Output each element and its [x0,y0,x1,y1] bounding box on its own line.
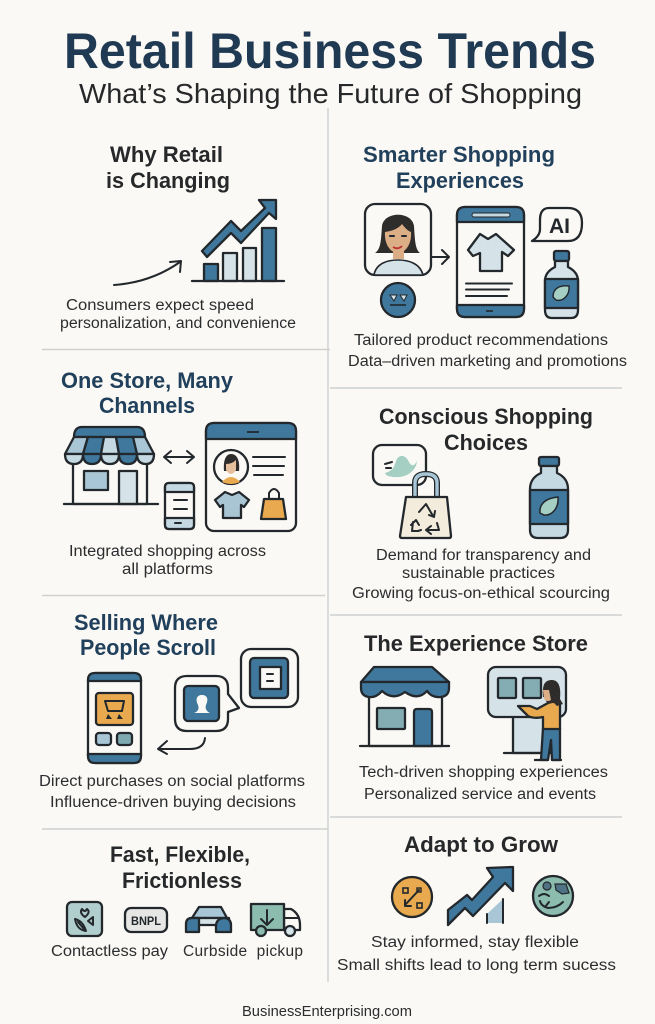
icon: experience storefront [360,667,449,746]
panel: the experience store [359,631,608,803]
text: consumers: Consumers expect speed [66,297,254,314]
icon: large leaf bottle [530,457,568,538]
icon: AI speech bubble: AI [549,215,570,238]
text: integrated [69,543,266,578]
panel: adapt to grow [337,832,616,974]
arrow: curved [114,261,181,285]
text: recommendations: Tailored product recommendations [354,332,608,349]
text: direct purchases: Direct purchases on social platforms [39,773,305,790]
heading: experience store: The Experience Store [364,631,588,656]
icon: product card bubble [241,649,298,707]
text: recommendations [348,332,627,370]
heading: smarter shopping [363,142,555,193]
title: Retail Business Trends [64,23,596,79]
panel: why retail is changing [60,142,296,332]
arrow: back to phone [158,738,205,754]
icon: profile speech bubble [175,676,239,731]
text: curbside: Curbside pickup [183,943,303,960]
text: demand: Demand for transparency and [376,547,591,564]
text: stay informed [337,934,616,974]
text: stay informed: Small shifts lead to long term sucess [337,957,616,974]
icon: growth arrow [448,867,513,925]
panel: fast, flexible, frictionless [51,842,303,960]
icon: orange network circle [392,877,432,917]
icon: BNPL card: BNPL [131,916,161,928]
text: tech-driven [359,764,608,803]
icon: small phone [165,483,194,529]
title [64,23,596,109]
text: contactless: Contactless pay [51,943,168,960]
icon: green globe [533,876,573,916]
heading: selling: Selling Where [74,610,218,635]
heading: smarter shopping: Smarter Shopping [363,142,555,167]
icon: kiosk with shopper [488,667,566,760]
text: direct purchases: Influence-driven buying decisions [50,794,296,811]
icon: shopper portrait [365,204,431,275]
text: recommendations: Data–driven marketing and promotions [348,353,627,370]
text: demand [352,547,610,602]
heading: adapt: Adapt to Grow [404,832,559,857]
text: demand: Growing focus-on-ethical scourcing [352,585,610,602]
icon: rising bar chart [192,200,284,281]
heading: conscious shopping: Choices [444,430,528,455]
icon: shopping phone [88,673,141,763]
icon: contactless pay [67,902,102,936]
text: stay informed: Stay informed, stay flexible [371,934,579,951]
heading: one store: Channels [99,393,195,418]
panel: selling where people scroll [39,610,305,811]
text: tech-driven: Tech-driven shopping experiences [359,764,608,781]
heading: selling: People Scroll [80,635,216,660]
heading: one store: One Store, Many [61,368,234,393]
icon: recycling tote bag [400,474,451,538]
text: direct purchases [39,773,305,811]
icon: phone with shirt [457,207,524,317]
text: integrated: Integrated shopping across [69,543,266,560]
text: integrated: all platforms [122,561,213,578]
text: tech-driven: Personalized service and events [364,786,596,803]
heading: conscious shopping: Conscious Shopping [379,404,593,429]
panel: one store, many channels [61,368,296,578]
text: demand: sustainable practices [402,565,555,582]
icon: storefront [64,427,158,504]
heading: fast [110,842,250,893]
icon: online store window [206,423,296,531]
heading: one store [61,368,234,418]
heading: why retail: Why Retail [110,142,223,167]
arrow: two-way [164,451,194,463]
icon: leaf bottle [545,251,578,318]
icon: AI speech bubble [532,208,582,241]
heading: fast: Fast, Flexible, [110,842,250,867]
panel: smarter shopping experiences [348,142,627,370]
text: consumers: personalization, and convenience [60,315,296,332]
heading: selling [74,610,218,660]
icon: car [186,907,231,932]
panel: conscious shopping choices [352,404,610,602]
icon: speech box with leaf [373,445,426,485]
arrow: portrait to phone [432,250,449,264]
heading: fast: Frictionless [122,868,242,893]
heading: conscious shopping [379,404,593,455]
subtitle: What’s Shaping the Future of Shopping [79,78,582,109]
text: consumers [60,297,296,332]
icon: BNPL card [125,908,167,932]
heading: why retail: is Changing [106,168,230,193]
footer: website: BusinessEnterprising.com [242,1004,412,1020]
icon: blue face badge [381,283,415,317]
heading: why retail [106,142,230,193]
heading: smarter shopping: Experiences [396,168,524,193]
icon: delivery truck [251,904,300,936]
